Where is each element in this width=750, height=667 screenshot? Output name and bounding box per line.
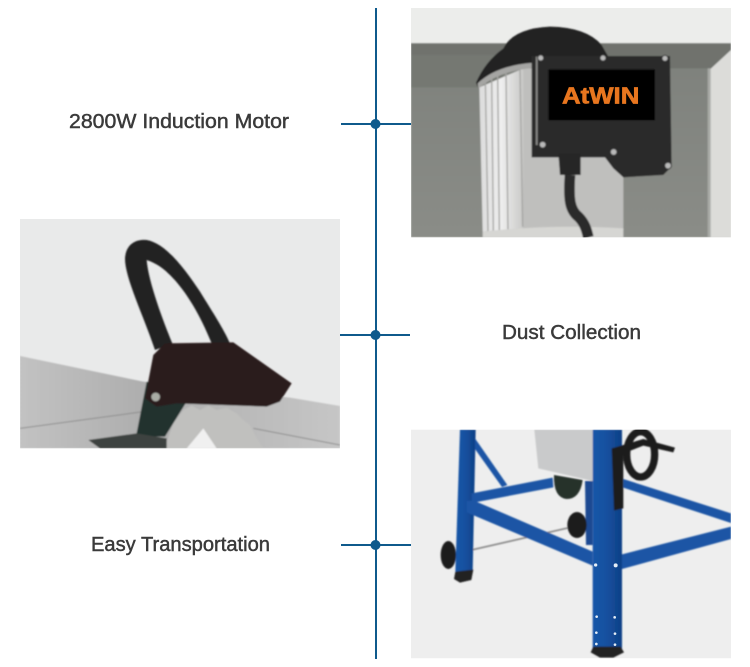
screws [538, 55, 671, 169]
fan cap [476, 27, 608, 88]
front-right bars [623, 479, 731, 523]
hose [125, 240, 230, 350]
blade [166, 406, 226, 448]
motor underside [554, 475, 583, 499]
heading: Easy Transportation: Easy Transportation [91, 534, 270, 556]
connector: dust collection [340, 330, 410, 340]
rear leg [455, 430, 476, 572]
feet [454, 570, 473, 583]
cable [558, 153, 581, 175]
timeline spine [375, 8, 377, 659]
gray panel [534, 430, 593, 481]
handwheel [627, 432, 655, 477]
photo: stand [411, 430, 731, 658]
photo: motor [411, 8, 731, 237]
heading: 2800W Induction Motor: 2800W Induction Motor [69, 111, 289, 133]
arm [136, 382, 187, 437]
AITWIN logo: AtWIN [562, 83, 639, 109]
motor housing [523, 68, 623, 230]
hood [145, 342, 292, 407]
connector: transportation [341, 540, 411, 550]
heading: Dust Collection: Dust Collection [502, 322, 641, 344]
wheels [441, 541, 456, 569]
rivets [594, 563, 618, 646]
connector: motor [341, 119, 411, 129]
axle [472, 527, 573, 550]
terminal box [532, 56, 672, 177]
front leg [593, 430, 622, 652]
photo: dust collection hood [20, 219, 340, 448]
